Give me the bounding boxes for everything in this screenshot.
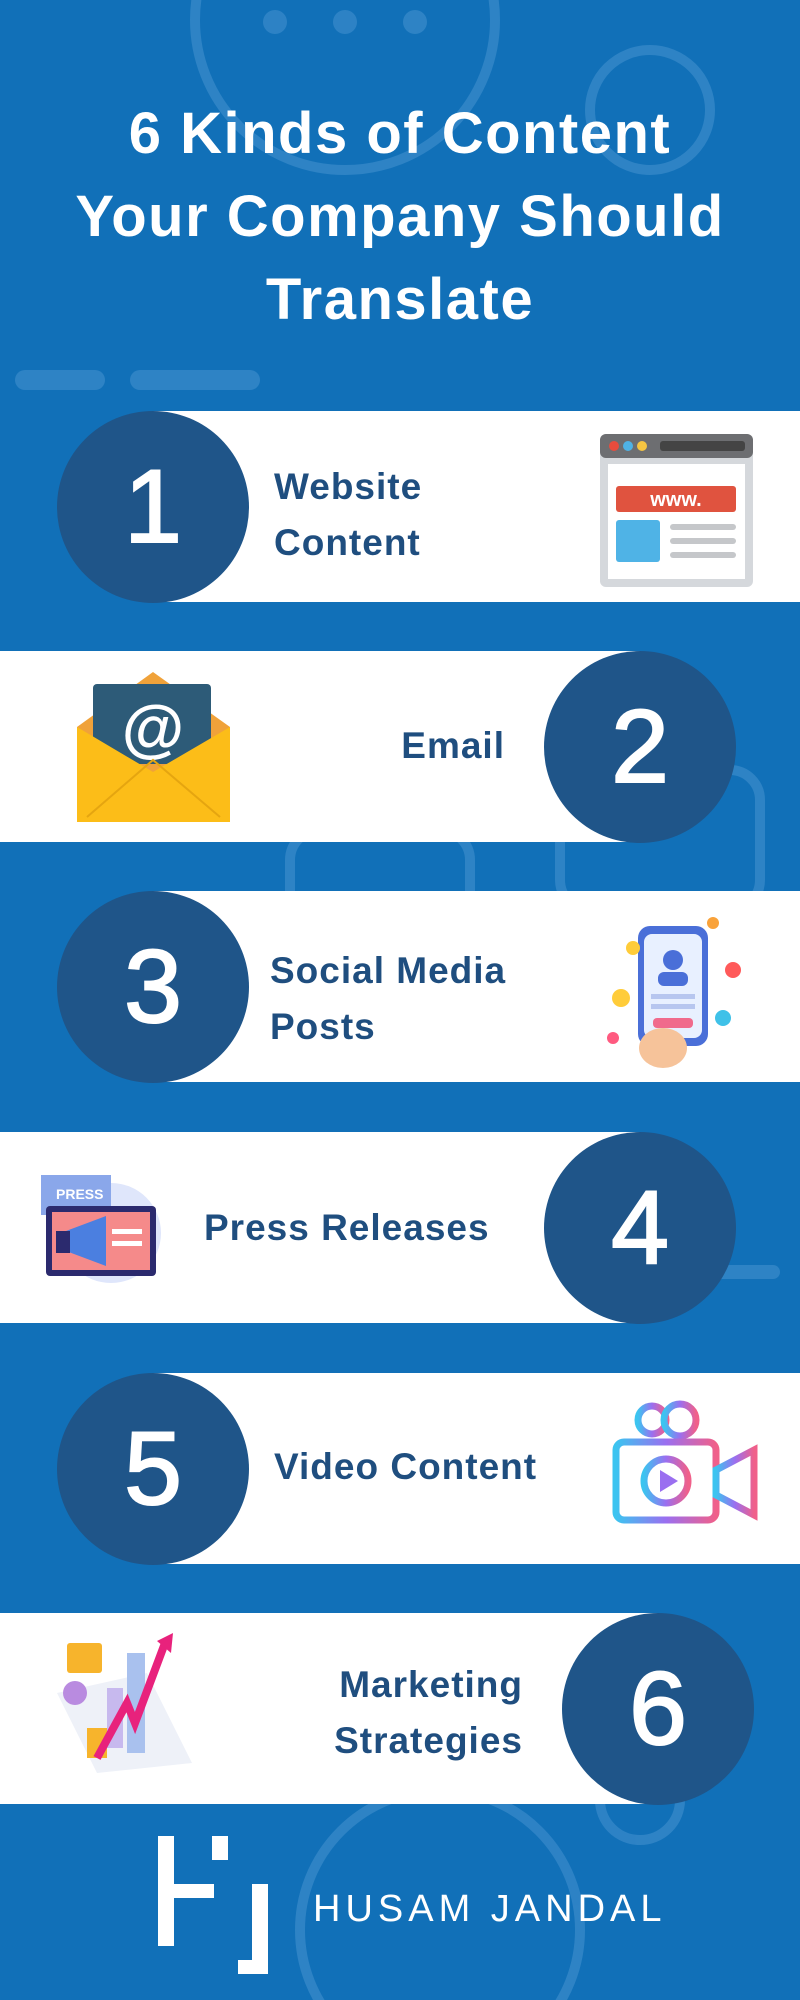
icon: envelope	[77, 672, 230, 822]
panel 4: press releases	[0, 1132, 736, 1324]
label: social media posts: Social Media	[270, 950, 506, 991]
panel 5: video content	[57, 1373, 800, 1565]
number circle 3: 3	[124, 929, 182, 1045]
icon: browser window: www.	[649, 489, 702, 511]
label: email: Email	[401, 725, 505, 766]
title: 6 Kinds of Content	[129, 101, 671, 166]
logo mark HJ	[158, 1836, 268, 1974]
logo	[158, 1836, 666, 1974]
icon: video camera	[612, 1400, 758, 1524]
icon: phone social	[607, 917, 741, 1068]
icon: megaphone press	[41, 1175, 161, 1283]
title	[75, 101, 725, 332]
number circle 1: 1	[124, 449, 182, 565]
label: social media posts: Posts	[270, 1006, 376, 1047]
label: press releases: Press Releases	[204, 1207, 490, 1248]
panel 3: social media	[57, 891, 800, 1083]
label: marketing strategies: Marketing	[339, 1664, 523, 1705]
label: marketing strategies: Strategies	[334, 1720, 523, 1761]
label: marketing strategies	[334, 1664, 523, 1761]
icon: megaphone press: PRESS	[56, 1186, 103, 1202]
panel 6: marketing strategies	[0, 1613, 754, 1805]
label: website content: Website	[274, 466, 422, 507]
number circle 5	[57, 1373, 249, 1565]
panel 1: website content	[57, 411, 800, 603]
icon: marketing chart	[57, 1633, 192, 1773]
number circle 2: 2	[611, 689, 669, 805]
label: website content	[274, 466, 422, 563]
number circle 2	[544, 651, 736, 843]
number circle 4: 4	[611, 1170, 669, 1286]
icon: browser window	[600, 434, 753, 587]
number circle 5: 5	[124, 1411, 182, 1527]
label: social media posts	[270, 950, 506, 1047]
number circle 1	[57, 411, 249, 603]
icon: envelope: @	[122, 692, 184, 764]
number circle 3	[57, 891, 249, 1083]
number circle 6: 6	[629, 1651, 687, 1767]
label: video content: Video Content	[274, 1446, 537, 1487]
label: website content: Content	[274, 522, 421, 563]
panel 2: email	[0, 651, 736, 843]
number circle 4	[544, 1132, 736, 1324]
title: Your Company Should	[75, 184, 725, 249]
number circle 6	[562, 1613, 754, 1805]
title: Translate	[266, 267, 534, 332]
logo text: HUSAM JANDAL	[313, 1888, 666, 1930]
